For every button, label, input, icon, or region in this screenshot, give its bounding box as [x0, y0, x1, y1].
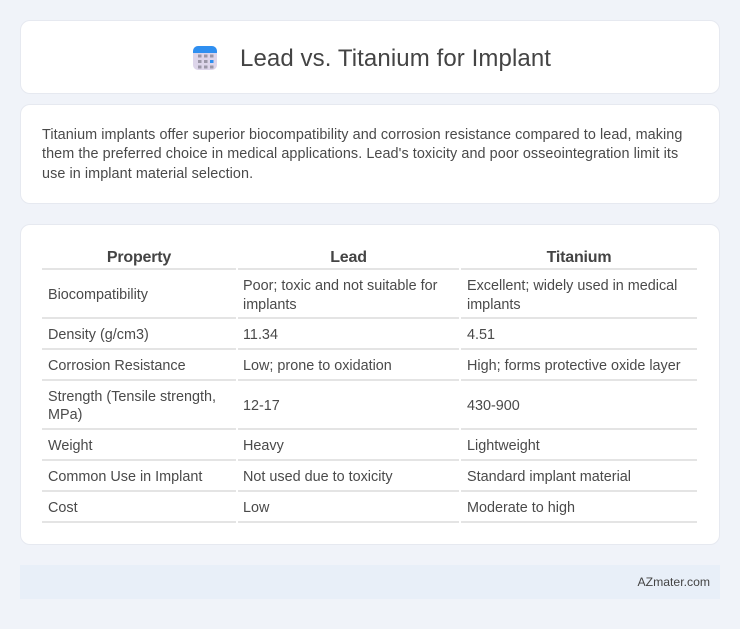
row: density: 11.34 [243, 327, 278, 343]
row: strength: 430-900 [467, 398, 520, 414]
intro text [42, 127, 682, 182]
row: weight: Heavy [243, 438, 284, 454]
title: Lead vs. Titanium for Implant [240, 45, 551, 72]
icon: calendar [193, 46, 217, 70]
row: common use: Common Use in Implant [48, 469, 202, 485]
row: corrosion resistance: Corrosion Resistance [48, 358, 186, 374]
footer bar [20, 565, 720, 599]
row: biocompatibility: Poor; toxic and not suitable for [243, 278, 437, 294]
row: strength: 12-17 [243, 398, 280, 414]
row: common use: Not used due to toxicity [243, 469, 393, 485]
row: cost: Low [243, 500, 269, 516]
row: density [42, 327, 697, 350]
row: cost [42, 500, 697, 523]
table header [42, 249, 697, 270]
header panel [20, 20, 720, 94]
row: cost: Moderate to high [467, 500, 575, 516]
row: corrosion resistance: Low; prone to oxidation [243, 358, 392, 374]
table panel [20, 224, 720, 545]
table header: Property [107, 249, 171, 266]
row: weight: Lightweight [467, 438, 540, 454]
row: biocompatibility [42, 278, 697, 319]
row: biocompatibility: implants [243, 297, 297, 313]
row: weight [42, 438, 697, 461]
table header: Titanium [547, 249, 611, 266]
row: strength [42, 389, 697, 430]
row: strength: Strength (Tensile strength, [48, 389, 216, 405]
row: density: 4.51 [467, 327, 495, 343]
footer credit: AZmater.com [638, 575, 710, 589]
row: common use [42, 469, 697, 492]
row: corrosion resistance: High; forms protective oxide layer [467, 358, 681, 374]
row: weight: Weight [48, 438, 93, 454]
row: common use: Standard implant material [467, 469, 631, 485]
intro text panel [20, 104, 720, 204]
row: cost: Cost [48, 500, 78, 516]
row: strength: MPa) [48, 407, 82, 423]
row: biocompatibility: implants [467, 297, 521, 313]
intro text: use in implant material selection. [42, 166, 253, 182]
row: density: Density (g/cm3) [48, 327, 149, 343]
row: corrosion resistance [42, 358, 697, 381]
table header: Lead [330, 249, 367, 266]
row: biocompatibility: Biocompatibility [48, 287, 148, 303]
comparison table [42, 249, 697, 523]
intro text: Titanium implants offer superior biocompatibility and corrosion resistance compared to lead, making [42, 127, 682, 143]
row: biocompatibility: Excellent; widely used in medical [467, 278, 677, 294]
intro text: them the preferred choice in medical applications. Lead's toxicity and poor osseointegration limit its [42, 146, 678, 162]
